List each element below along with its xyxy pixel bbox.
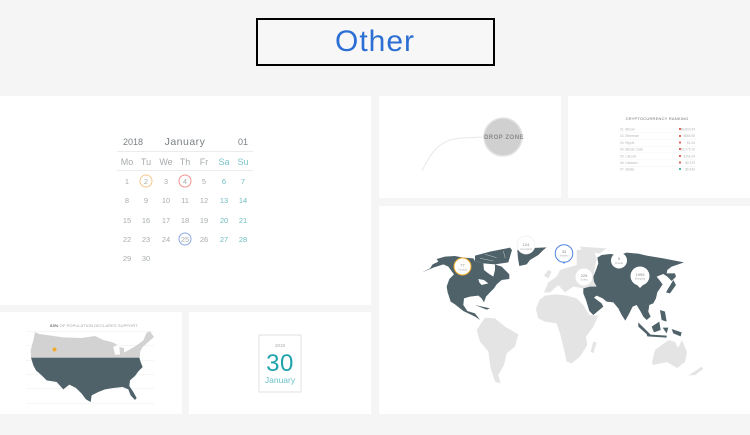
marker: Sweden bbox=[555, 245, 573, 264]
marker: Turkey: Turkey bbox=[580, 278, 589, 282]
day numbers: 28 bbox=[239, 235, 247, 244]
marker: Turkey: 225 bbox=[581, 273, 588, 278]
day numbers: 22 bbox=[123, 235, 131, 244]
day numbers: 27 bbox=[220, 235, 228, 244]
ranking rows: $1,075.10 bbox=[681, 148, 695, 152]
ranking rows: 04. Bitcoin Cash bbox=[620, 148, 643, 152]
star marker bbox=[52, 348, 56, 352]
light grey continents bbox=[477, 247, 703, 383]
day numbers: 23 bbox=[142, 235, 150, 244]
panel: drop zone bbox=[379, 96, 561, 198]
panel: date card bbox=[189, 312, 371, 414]
trend markers bbox=[679, 128, 681, 170]
card bbox=[259, 335, 301, 392]
calendar header bbox=[123, 136, 248, 148]
weekday labels: Fr bbox=[200, 157, 208, 167]
day numbers: 14 bbox=[239, 196, 247, 205]
weekday labels: Su bbox=[237, 157, 249, 167]
panel: calendar bbox=[0, 96, 371, 305]
ranking rows: 03. Ripple bbox=[620, 141, 635, 145]
day numbers: 13 bbox=[220, 196, 228, 205]
marker: Canada bbox=[454, 258, 471, 275]
white inland water bbox=[478, 251, 505, 285]
day numbers: 6 bbox=[222, 177, 226, 186]
day numbers: 25 bbox=[181, 235, 189, 244]
ranking rows bbox=[620, 128, 695, 172]
map heading: 63% OF POPULATION DECLARES SUPPORT bbox=[50, 323, 138, 328]
day numbers: 20 bbox=[220, 216, 228, 225]
day numbers: 5 bbox=[202, 177, 206, 186]
ranking rows: 06. Cardano bbox=[620, 161, 638, 165]
ranking rows: 02. Ethereum bbox=[620, 134, 639, 138]
panel: USA support map bbox=[0, 312, 182, 414]
day numbers: 26 bbox=[200, 235, 208, 244]
dark highlighted countries bbox=[422, 247, 684, 338]
day numbers: 12 bbox=[200, 196, 208, 205]
marker: Greenland: Greenland bbox=[520, 248, 532, 251]
marker: Canada: Canada bbox=[458, 268, 467, 272]
day numbers: 18 bbox=[181, 216, 189, 225]
marker: Greenland bbox=[517, 236, 535, 254]
ranking rows: $565.95 bbox=[683, 134, 695, 138]
Australia bbox=[652, 340, 687, 368]
card: 2018 bbox=[275, 343, 286, 348]
day numbers: 2 bbox=[144, 177, 148, 186]
day numbers: 15 bbox=[123, 216, 131, 225]
panel: cryptocurrency ranking bbox=[568, 96, 750, 198]
ranking rows: $152.04 bbox=[683, 154, 695, 158]
marker: Russia: Russia bbox=[615, 262, 623, 265]
marker: Sweden: 33 bbox=[562, 249, 567, 254]
panel: world map bbox=[379, 206, 750, 414]
drop zone circle bbox=[484, 118, 524, 156]
title box: Other bbox=[335, 25, 415, 58]
day numbers: 24 bbox=[162, 235, 170, 244]
day numbers: 4 bbox=[183, 177, 187, 186]
marker: Canada: 77 bbox=[460, 262, 465, 268]
day numbers bbox=[123, 177, 247, 263]
weekday labels: Mo bbox=[121, 157, 133, 167]
day numbers: 10 bbox=[162, 196, 170, 205]
title box bbox=[257, 19, 494, 65]
day numbers: 11 bbox=[181, 196, 189, 205]
USA lower part bbox=[31, 358, 143, 402]
ranking rows: $0.430 bbox=[685, 168, 695, 172]
calendar header: 2018 bbox=[123, 137, 143, 147]
day numbers: 21 bbox=[239, 216, 247, 225]
ranking rows: $1.04 bbox=[687, 141, 695, 145]
marker: Sweden: Sweden bbox=[559, 254, 569, 258]
marker: Russia bbox=[611, 252, 627, 268]
ranking rows: 05. Litecoin bbox=[620, 154, 637, 158]
day numbers: 1 bbox=[125, 177, 129, 186]
day numbers: 9 bbox=[144, 196, 148, 205]
marker: Greenland: 124 bbox=[523, 242, 530, 247]
card: 30 bbox=[266, 350, 294, 377]
day numbers: 19 bbox=[200, 216, 208, 225]
marker: Russia: 5 bbox=[618, 256, 621, 261]
connector curve bbox=[422, 137, 484, 171]
weekday labels bbox=[121, 157, 249, 167]
calendar header: 01 bbox=[238, 137, 248, 147]
ranking heading: CRYPTOCURRENCY RANKING bbox=[626, 116, 688, 121]
day numbers: 30 bbox=[142, 254, 150, 263]
day numbers: 29 bbox=[123, 254, 131, 263]
marker: Mongolia: Mongolia bbox=[635, 278, 646, 280]
weekday labels: Th bbox=[180, 157, 190, 167]
day numbers: 7 bbox=[241, 177, 245, 186]
card: January bbox=[265, 375, 296, 385]
ranking rows: $9,803.54 bbox=[681, 128, 695, 132]
world map shapes bbox=[422, 247, 703, 383]
Asia mainland bbox=[583, 253, 684, 321]
marker: Mongolia: 1995 bbox=[636, 272, 645, 277]
marker: Turkey bbox=[576, 268, 592, 286]
day numbers: 16 bbox=[142, 216, 150, 225]
USA upper part bbox=[31, 331, 154, 357]
day numbers: 8 bbox=[125, 196, 129, 205]
marker: Mongolia bbox=[630, 266, 650, 288]
day numbers: 3 bbox=[164, 177, 168, 186]
ranking rows: 07. Stellar bbox=[620, 168, 635, 172]
weekday labels: Tu bbox=[141, 157, 151, 167]
ranking rows: $0.379 bbox=[685, 161, 695, 165]
ranking rows: 01. Bitcoin bbox=[620, 128, 635, 132]
weekday labels: Sa bbox=[218, 157, 230, 167]
weekday labels: We bbox=[159, 157, 173, 167]
highlighted dates bbox=[140, 175, 191, 245]
North America mainland bbox=[422, 256, 509, 320]
drop zone circle: DROP ZONE bbox=[484, 135, 524, 141]
calendar header: January bbox=[165, 136, 206, 148]
day numbers: 17 bbox=[162, 216, 170, 225]
